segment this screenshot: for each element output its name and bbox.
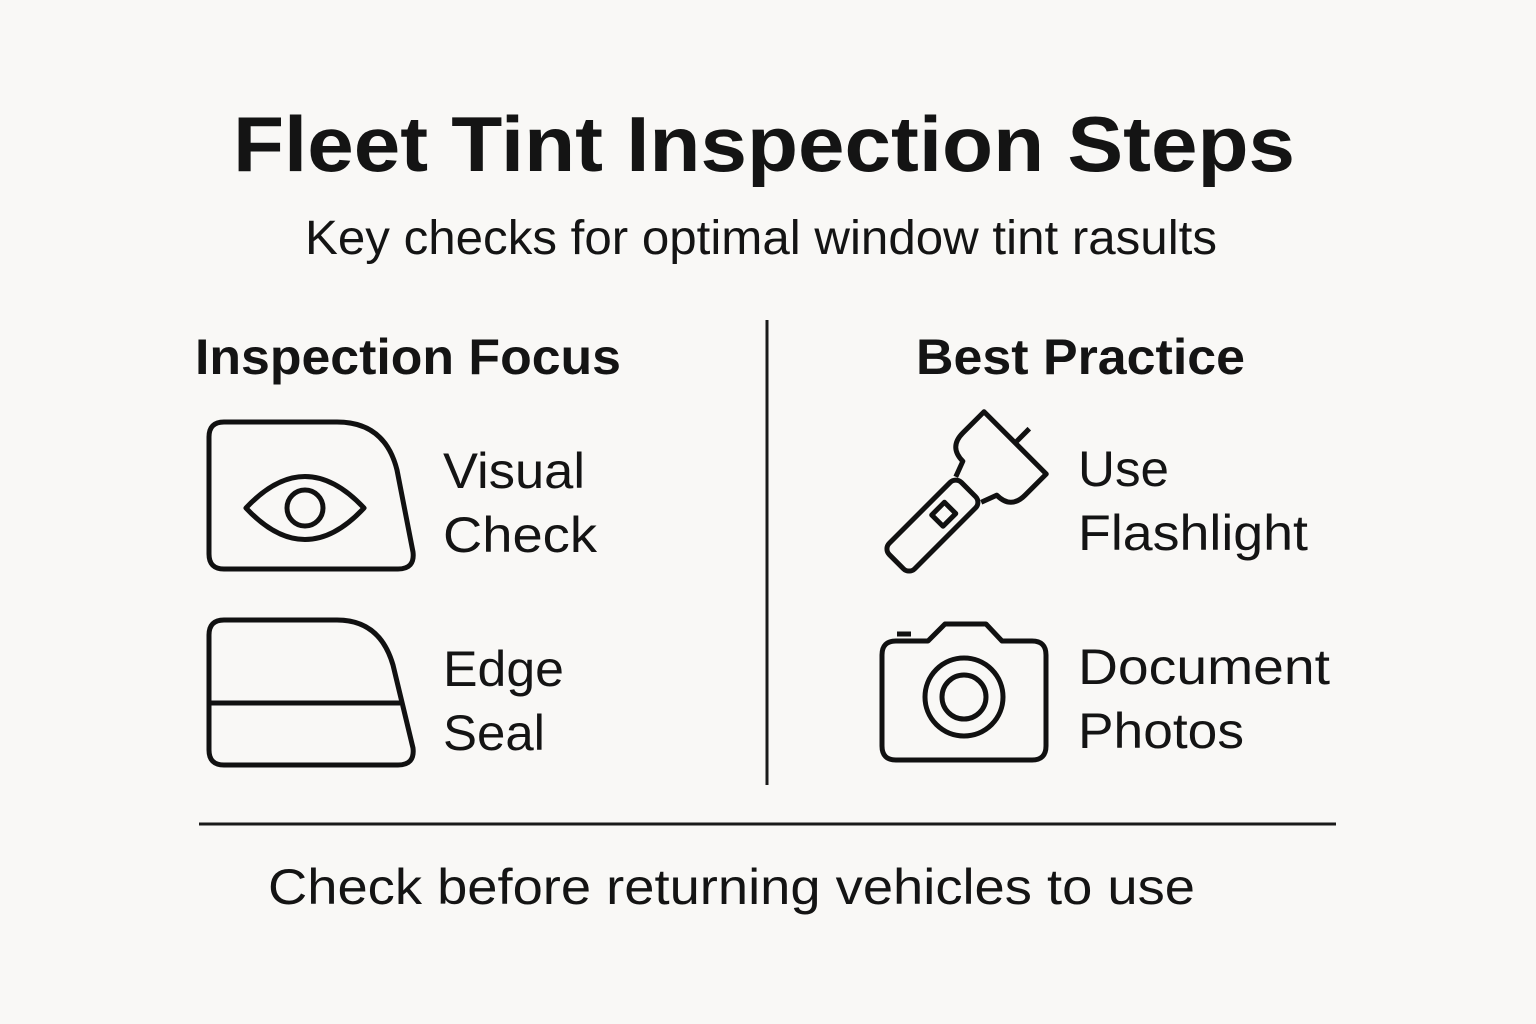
label: document photos: Document [1078,639,1330,695]
label: edge seal: Edge [443,641,564,697]
label: visual check: Check [443,507,598,563]
label: visual check: Visual [443,443,585,499]
subtitle: Key checks for optimal window tint rasults [305,212,1217,265]
icon: window with eye [209,422,413,569]
icon: camera [882,624,1046,760]
heading: inspection focus: Inspection Focus [195,329,621,385]
label: use flashlight: Flashlight [1078,505,1308,561]
title: Fleet Tint Inspection Steps [233,100,1295,188]
label: document photos: Photos [1078,703,1244,759]
label: use flashlight [1078,441,1308,561]
icon: window edge seal [209,620,413,765]
label: visual check [443,443,598,563]
label: use flashlight: Use [1078,441,1169,497]
label: document photos [1078,639,1330,759]
label: edge seal: Seal [443,705,545,761]
icon: flashlight [865,398,1060,593]
footer note: Check before returning vehicles to use [268,859,1195,915]
heading: best practice: Best Practice [916,329,1245,385]
label: edge seal [443,641,564,761]
